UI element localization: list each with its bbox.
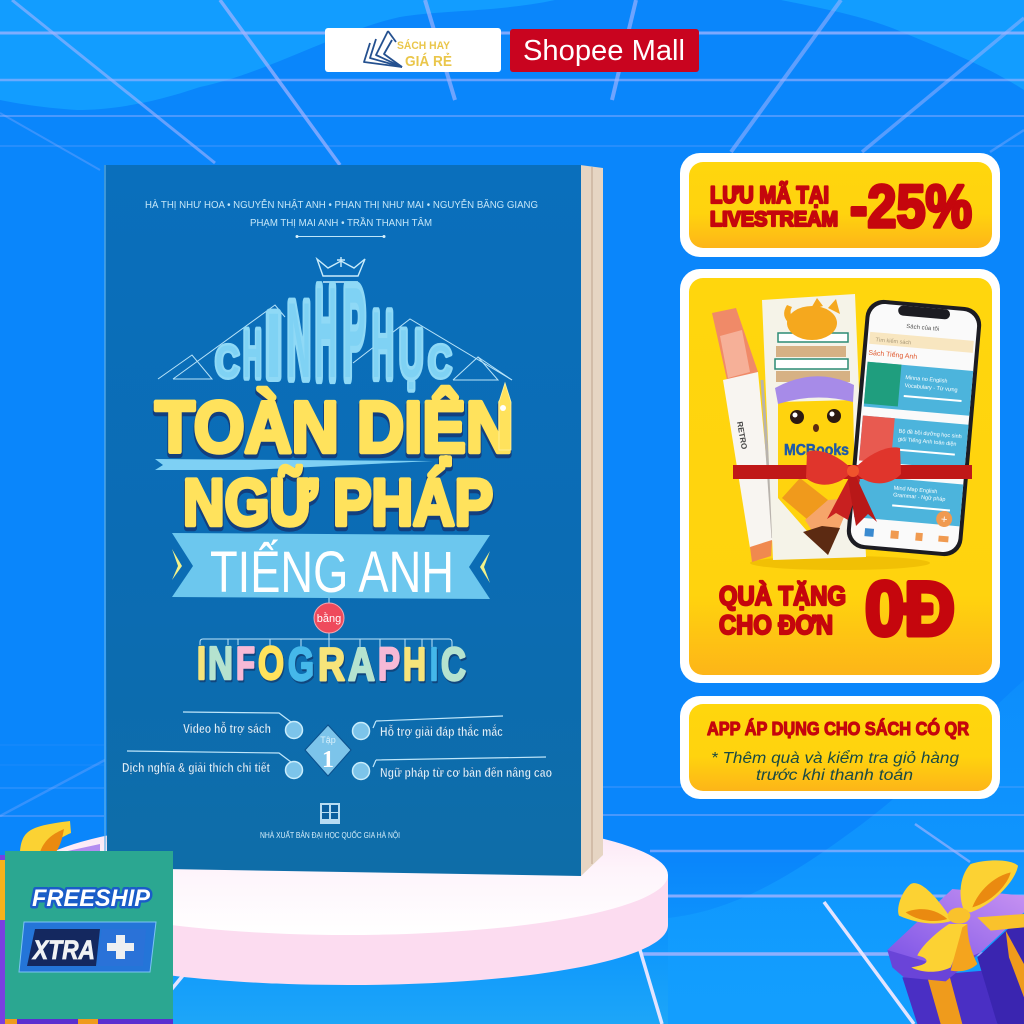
icon: pencil bookmark — [762, 294, 866, 560]
logo: shopee mall — [510, 29, 699, 72]
heading: toan dien: TOÀN DIỆN — [155, 387, 513, 468]
icon: phone app: Bộ đề bồi dưỡng học sinh — [898, 429, 962, 440]
badge: bang — [314, 598, 344, 639]
gift shadow — [750, 556, 930, 570]
heading: infographic: H — [403, 638, 426, 690]
icon: phone app: Sách Tiếng Anh — [868, 348, 918, 361]
right gift box — [887, 860, 1024, 1024]
icon: phone app — [845, 298, 983, 558]
feature list: Video hỗ trợ sách — [183, 721, 271, 736]
banner: tieng anh: TIẾNG ANH — [210, 540, 454, 605]
publisher logo — [320, 803, 340, 824]
panel: discount: LƯU MÃ TẠI — [710, 181, 829, 209]
icon: red ribbon and bow — [733, 447, 972, 526]
heading: infographic: N — [208, 637, 233, 689]
badge: freeship xtra — [5, 851, 173, 1019]
heading: infographic: P — [378, 638, 400, 690]
panel: discount: LIVESTREAM — [710, 208, 838, 231]
heading: infographic: R — [318, 638, 345, 690]
volume badge — [305, 725, 351, 776]
feature list: Hỗ trợ giải đáp thắc mắc — [380, 724, 503, 739]
book cover — [104, 165, 581, 876]
heading: infographic: G — [288, 638, 314, 690]
panel: free gift: CHO ĐƠN — [719, 610, 833, 640]
icon: phone app: Minna no English — [905, 375, 948, 385]
logo: sach hay gia re: SÁCH HAY — [397, 39, 451, 52]
icon: pencil bookmark: MCBooks — [784, 442, 849, 459]
icon: marker pen: RETRO — [735, 421, 749, 450]
heading: infographic: O — [258, 637, 284, 689]
panel: app note — [680, 696, 1000, 799]
icon: open book — [364, 31, 402, 67]
heading: chinh phuc: C — [428, 337, 452, 387]
icon: phone app: Mind Map English — [893, 485, 937, 495]
icon: marker pen — [712, 308, 774, 562]
panel: free gift: QUÀ TẶNG — [719, 580, 846, 611]
panel: app note: * Thêm quà và kiểm tra giỏ hàng — [711, 750, 959, 767]
heading: infographic — [197, 637, 466, 690]
icon: crown — [317, 257, 365, 282]
heading: chinh phuc: P — [343, 261, 366, 404]
label: xtra plus — [19, 922, 156, 972]
icon: phone app: Vocabulary - Từ vựng — [904, 383, 958, 394]
icon: phone app: Grammar - Ngữ pháp — [893, 492, 946, 503]
heading: chinh phuc: C — [215, 338, 240, 387]
authors: HÀ THỊ NHƯ HOA • NGUYỄN NHẬT ANH • PHAN THỊ NHƯ MAI • NGUYỄN BĂNG GIANG — [145, 198, 538, 211]
label: xtra plus: XTRA — [31, 935, 95, 965]
badge: bang: bằng — [317, 612, 341, 625]
heading: chinh phuc: H — [315, 260, 337, 405]
authors — [145, 198, 538, 238]
heading: chinh phuc: H — [243, 315, 262, 392]
heading: toan dien: TOÀN DIỆN — [155, 390, 513, 471]
heading: chinh phuc: Ụ — [399, 316, 424, 392]
icon: big ben tower — [499, 383, 511, 450]
panel: app note: APP ÁP DỤNG CHO SÁCH CÓ QR — [707, 718, 969, 739]
panel: discount: -25% — [850, 173, 972, 240]
logo: sach hay gia re — [325, 28, 501, 72]
authors: PHẠM THỊ MAI ANH • TRẦN THANH TÂM — [250, 216, 432, 229]
icon: phone app: giỏi Tiếng Anh toàn diện — [898, 436, 957, 448]
heading: chinh phuc — [215, 260, 452, 405]
roof lines — [158, 305, 512, 380]
panel: discount — [680, 153, 1000, 257]
volume badge: 1 — [322, 747, 334, 773]
feature list: Ngữ pháp từ cơ bản đến nâng cao — [380, 766, 552, 780]
heading: chinh phuc: I — [265, 294, 282, 397]
heading: infographic: A — [348, 638, 375, 690]
volume badge: Tập — [320, 735, 336, 745]
panel: free gift — [680, 269, 1000, 683]
heading: infographic: I — [430, 638, 438, 690]
infographic connector tree — [200, 639, 452, 650]
heading: infographic: F — [236, 637, 255, 689]
publisher name: NHÀ XUẤT BẢN ĐẠI HỌC QUỐC GIA HÀ NỘI — [260, 829, 400, 840]
icon: phone app: Tìm kiếm sách — [875, 337, 911, 346]
heading: infographic: C — [441, 638, 466, 690]
heading: ngu phap: NGỮ PHÁP — [183, 468, 493, 542]
panel: app note: trước khi thanh toán — [756, 767, 913, 784]
podium — [28, 815, 668, 985]
panel: free gift: 0Đ — [865, 567, 955, 652]
heading: infographic: I — [197, 637, 206, 689]
icon: phone app: + — [940, 514, 948, 526]
book — [104, 165, 603, 876]
left gift box — [0, 821, 173, 1024]
ribbon arrow — [155, 455, 450, 470]
book pages — [580, 165, 603, 876]
heading: ngu phap: NGỮ PHÁP — [183, 465, 493, 539]
feature list: Dịch nghĩa & giải thích chi tiết — [122, 761, 271, 775]
heading: chinh phuc: H — [372, 292, 394, 397]
feature list — [122, 712, 552, 780]
logo: sach hay gia re: GIÁ RẺ — [405, 53, 452, 70]
logo: shopee mall: Shopee Mall — [523, 35, 685, 67]
label: freeship: FREESHIP — [32, 885, 151, 912]
icon: phone app: Sách của tôi — [906, 323, 940, 333]
heading: chinh phuc: N — [287, 280, 311, 400]
